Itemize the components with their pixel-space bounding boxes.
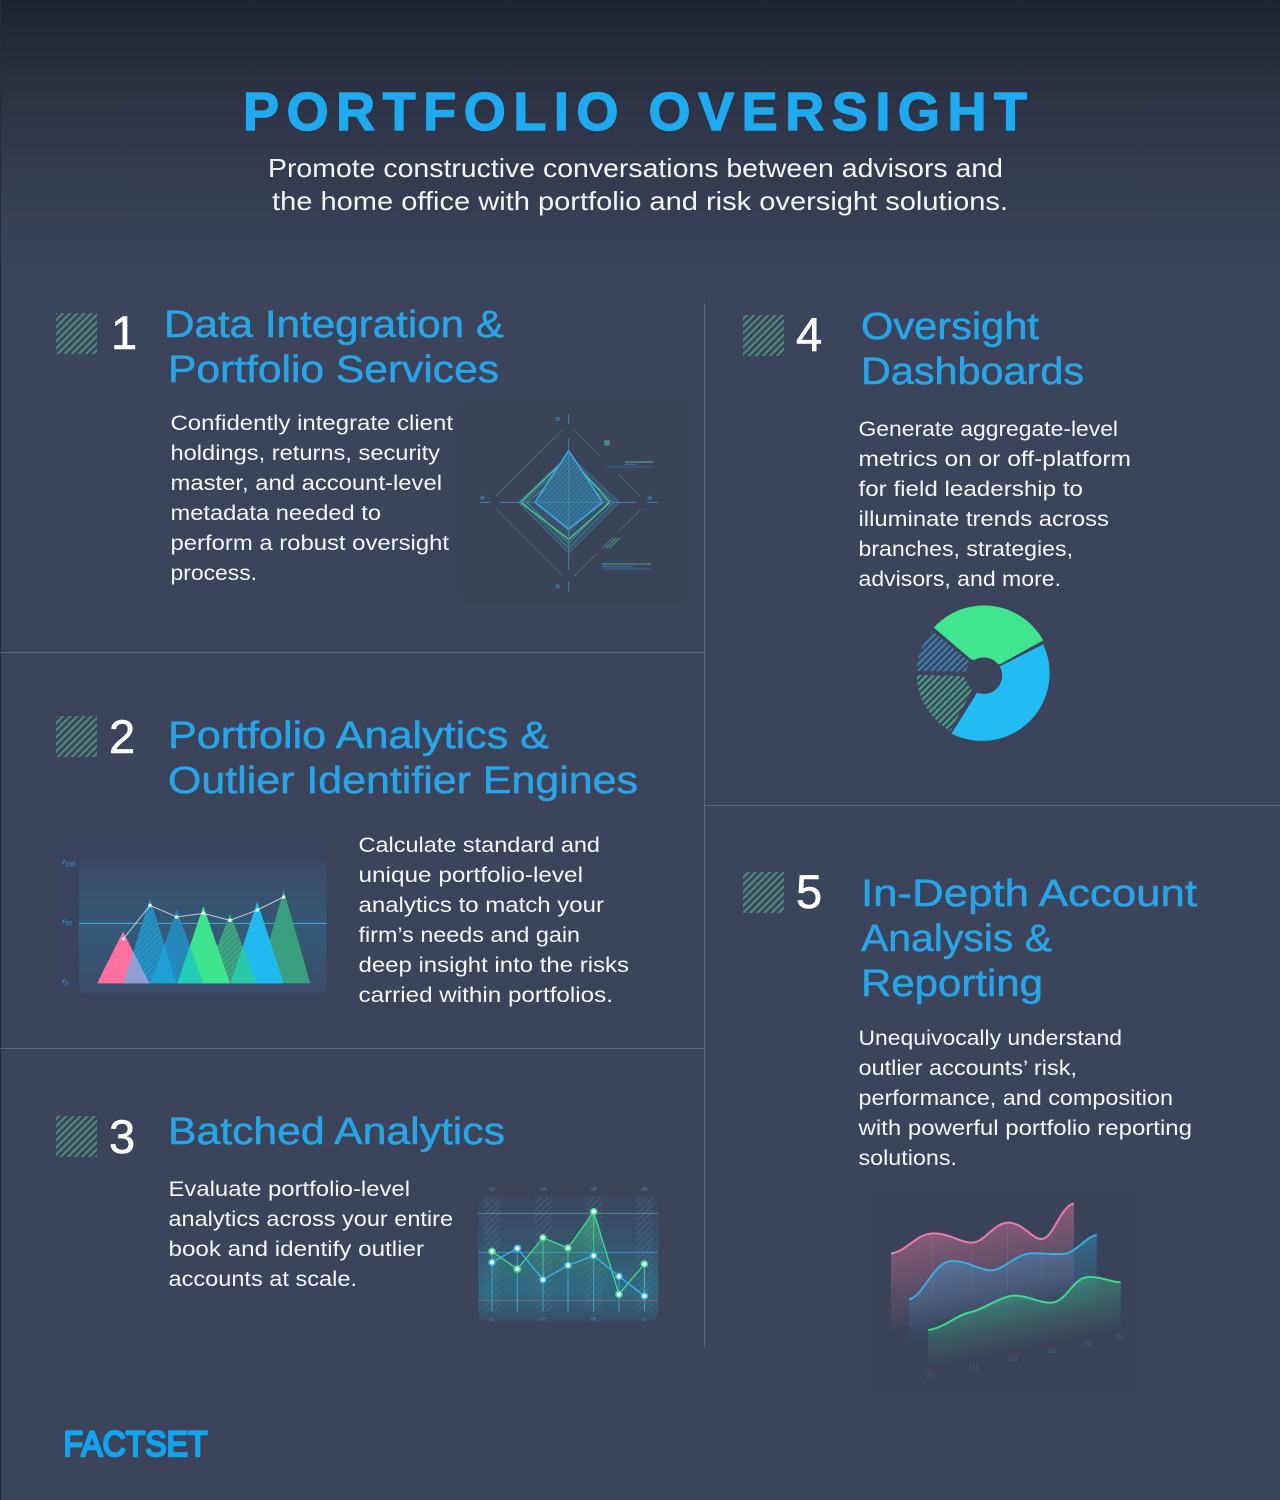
chart: triangle peaks: 0 [65, 981, 69, 988]
heading 5: In-Depth Account [861, 873, 1198, 915]
chart: batched line chart: 01 [489, 1317, 495, 1323]
text block 5: Unequivocally understand [858, 1026, 1122, 1050]
panel: section 2 portfolio analytics [53, 710, 638, 1007]
title: PORTFOLIO OVERSIGHT [243, 82, 1027, 142]
heading 4: Oversight [861, 306, 1039, 348]
text block 5: solutions. [858, 1146, 957, 1170]
chart: batched line chart: 08 [642, 1187, 648, 1193]
chart: layered area: 02 [1010, 1354, 1019, 1363]
heading 1: Portfolio Services [168, 349, 499, 391]
text block 2: carried within portfolios. [358, 983, 613, 1007]
text block 5: outlier accounts’ risk, [858, 1056, 1077, 1080]
logo: FactSet: FACTSET [64, 1425, 208, 1464]
text block 4: Generate aggregate-level [858, 417, 1118, 441]
number 5: 5 [796, 865, 822, 918]
panel: section 1 data integration [56, 304, 687, 603]
panel: section 3 batched analytics [56, 1110, 658, 1323]
text block 2: unique portfolio-level [358, 863, 583, 887]
text block 3: accounts at scale. [168, 1267, 357, 1291]
chart: layered area: 05 [1114, 1332, 1124, 1341]
text block 2: Calculate standard and [358, 833, 600, 857]
text block 4: for field leadership to [858, 477, 1083, 501]
icon: hatched square 3 [56, 1116, 97, 1157]
text block 1 [170, 411, 453, 585]
chart: batched line chart: 02 [489, 1187, 495, 1193]
text block 1: Confidently integrate client [170, 411, 453, 435]
chart: triangle peaks [53, 837, 329, 995]
chart: triangle peaks: 100 [65, 862, 76, 869]
panel: section 5 account analysis [743, 865, 1198, 1393]
text block 3 [168, 1177, 453, 1291]
chart: layered area: 00 [925, 1372, 935, 1381]
subtitle: Promote constructive conversations between advisors and [268, 153, 1003, 183]
text block 4: branches, strategies, [858, 537, 1073, 561]
text block 4: advisors, and more. [858, 567, 1061, 591]
text block 3: analytics across your entire [168, 1207, 453, 1231]
chart: layered area [870, 1190, 1133, 1393]
text block 4: illuminate trends across [858, 507, 1109, 531]
chart: batched line chart: 06 [591, 1187, 597, 1193]
text block 5: performance, and composition [858, 1086, 1173, 1110]
text block 4 [858, 417, 1131, 591]
text block 4: metrics on or off-platform [858, 447, 1131, 471]
number 2: 2 [109, 710, 135, 763]
chart: layered area: 04 [1083, 1339, 1092, 1348]
icon: hatched square 4 [743, 315, 784, 356]
icon: hatched square 5 [743, 872, 784, 913]
chart: batched line chart: 04 [540, 1187, 546, 1193]
text block 1: master, and account-level [170, 471, 442, 495]
heading 5: Reporting [861, 963, 1043, 1005]
heading 1: Data Integration & [164, 304, 504, 346]
panel: section 4 oversight dashboards [743, 306, 1131, 741]
heading 2: Portfolio Analytics & [168, 715, 549, 757]
number 4: 4 [796, 308, 822, 361]
icon: hatched square 1 [56, 313, 97, 354]
text block 1: holdings, returns, security [170, 441, 440, 465]
text block 1: perform a robust oversight [170, 531, 449, 555]
heading 2 [168, 715, 638, 802]
chart: batched line chart: 07 [642, 1317, 648, 1323]
text block 2: firm’s needs and gain [358, 923, 580, 947]
heading 2: Outlier Identifier Engines [168, 760, 638, 802]
heading 4: Dashboards [861, 351, 1084, 393]
subtitle [268, 153, 1008, 216]
heading 1 [164, 304, 504, 391]
text block 3: Evaluate portfolio-level [168, 1177, 410, 1201]
text block 3: book and identify outlier [168, 1237, 424, 1261]
chart: donut [916, 605, 1050, 741]
heading 5: Analysis & [861, 918, 1052, 960]
chart: layered area: 01 [970, 1363, 979, 1372]
text block 5: with powerful portfolio reporting [857, 1116, 1192, 1140]
chart: radar diamond [460, 400, 687, 603]
text block 2: analytics to match your [358, 893, 604, 917]
chart: batched line chart: 03 [540, 1317, 546, 1323]
number 1: 1 [111, 306, 137, 359]
text block 1: process. [170, 561, 257, 585]
chart: triangle peaks: 50 [65, 921, 73, 928]
chart: batched line chart [478, 1187, 658, 1323]
heading 4 [861, 306, 1084, 393]
heading 5 [861, 873, 1198, 1005]
subtitle: the home office with portfolio and risk oversight solutions. [272, 186, 1008, 216]
text block 2: deep insight into the risks [358, 953, 629, 977]
icon: hatched square 2 [56, 716, 97, 757]
chart: layered area: 03 [1047, 1346, 1057, 1355]
heading 3: Batched Analytics [168, 1111, 505, 1153]
number 3: 3 [109, 1110, 135, 1163]
text block 1: metadata needed to [170, 501, 381, 525]
chart: batched line chart: 05 [591, 1317, 597, 1323]
text block 2 [358, 833, 629, 1007]
text block 5 [857, 1026, 1192, 1170]
